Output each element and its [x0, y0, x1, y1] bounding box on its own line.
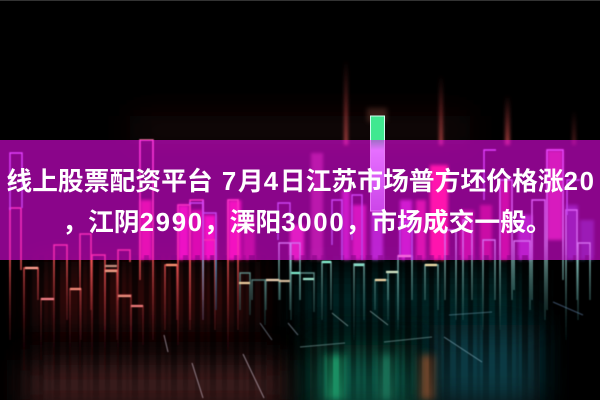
magenta caption band: [0, 140, 600, 260]
pale blue strokes in band: [10, 150, 580, 320]
upper red haze and light rays: [130, 60, 576, 145]
coloured columns behind the band: [140, 150, 594, 260]
top edge line: [0, 0, 600, 2]
bar outlines: right teal group: [240, 150, 590, 340]
headline line 2: ，江阴2990，溧阳3000，市场成交一般。: [62, 209, 552, 237]
bottom and side colour glow: [25, 262, 540, 400]
bar outlines: left red group: [10, 140, 238, 370]
diagonal floor reflection lines: [164, 302, 583, 398]
green bar: [367, 108, 387, 211]
headline line 1: 线上股票配资平台 7月4日江苏市场普方坯价格涨20: [6, 168, 596, 196]
bright caps on bars: [25, 256, 437, 306]
dark streak texture: [0, 255, 600, 400]
